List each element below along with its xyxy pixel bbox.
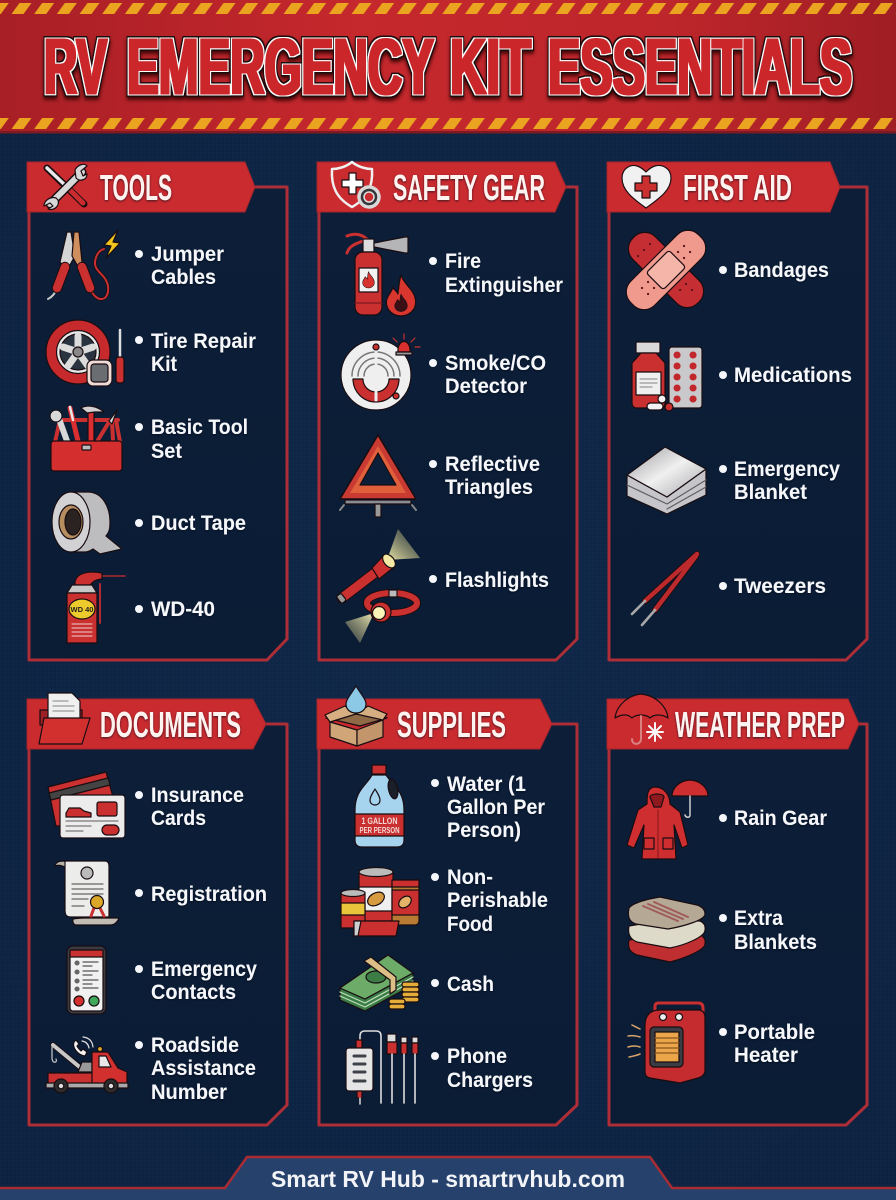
label: basic tool set: Basic Tool — [151, 416, 248, 439]
label: roadside assistance number: Roadside — [151, 1034, 239, 1057]
label: basic tool set: Set — [151, 440, 182, 463]
icon: medications — [632, 342, 702, 411]
label: fire extinguisher: Extinguisher — [445, 274, 563, 297]
title: KIT — [450, 22, 531, 111]
icon: water jug: 1 GALLON — [362, 816, 398, 826]
label: medications: Medications — [734, 364, 852, 387]
label: emergency blanket: Blanket — [734, 481, 807, 504]
icon: phone contacts — [67, 946, 106, 1014]
bullet — [429, 460, 437, 468]
label: water — [447, 773, 545, 842]
icon: canned food — [341, 868, 419, 936]
item: emergency blanket — [627, 447, 840, 514]
label: insurance cards — [151, 784, 244, 830]
label: rain gear: Rain Gear — [734, 807, 827, 830]
icon: box with water drop — [325, 686, 387, 746]
item: bandages — [620, 224, 829, 316]
item: duct tape — [52, 492, 246, 554]
icon: flashlight and headlamp — [336, 529, 420, 643]
icon: heart with cross — [622, 166, 671, 208]
heading: DOCUMENTS — [100, 704, 241, 745]
label: flashlights: Flashlights — [445, 569, 549, 592]
bullet — [135, 519, 143, 527]
bullet — [429, 575, 437, 583]
label: emergency blanket — [734, 458, 840, 504]
icon: umbrella and snowflake — [615, 694, 668, 744]
label: water: Person) — [447, 819, 521, 842]
bullet — [719, 371, 727, 379]
icon: emergency blanket — [627, 447, 706, 514]
bullet — [429, 359, 437, 367]
label: bandages: Bandages — [734, 259, 829, 282]
icon: registration scroll — [55, 861, 119, 925]
label: phone chargers — [447, 1045, 533, 1092]
item: tire repair kit — [46, 320, 256, 386]
bullet — [431, 779, 439, 787]
item: basic tool set — [50, 406, 248, 471]
title: EMERGENCY — [127, 22, 434, 111]
label: extra blankets: Blankets — [734, 931, 817, 954]
icon: water jug — [355, 765, 404, 847]
icon: tweezers — [632, 554, 697, 625]
bullet — [431, 979, 439, 987]
icon: cash and coins — [340, 955, 419, 1011]
icon: toolbox — [50, 406, 122, 471]
label: phone chargers: Phone — [447, 1045, 507, 1068]
icon: shield and gear — [332, 162, 379, 207]
icon: wrench and screwdriver — [44, 164, 87, 209]
label: extra blankets: Extra — [734, 907, 783, 930]
icon: water jug: PER PERSON — [360, 826, 400, 835]
icon: stacked blankets — [628, 897, 705, 962]
item: flashlights — [336, 529, 549, 643]
panel header: supplies — [317, 686, 552, 749]
label: water: Gallon Per — [447, 796, 545, 819]
item: reflective triangles — [340, 435, 540, 517]
label: portable heater — [734, 1021, 815, 1067]
label: insurance cards: Cards — [151, 807, 206, 830]
panel header: weather prep — [607, 694, 859, 749]
label: reflective triangles: Reflective — [445, 453, 540, 476]
bullet — [135, 965, 143, 973]
label: extra blankets — [734, 907, 817, 954]
footer text: Smart RV Hub - smartrvhub.com — [271, 1166, 625, 1192]
heading: TOOLS — [100, 167, 172, 208]
bullet — [429, 257, 437, 265]
label: roadside assistance number: Number — [151, 1081, 227, 1104]
item: non-perishable food — [341, 866, 548, 936]
footer — [0, 1157, 896, 1200]
label: smoke/co detector — [445, 352, 546, 398]
label: smoke/co detector: Detector — [445, 375, 527, 398]
panel header: tools — [27, 162, 255, 212]
label: non-perishable food: Non- — [447, 866, 493, 889]
title banner — [0, 0, 896, 134]
label: portable heater: Heater — [734, 1044, 798, 1067]
label: phone chargers: Chargers — [447, 1069, 533, 1092]
label: reflective triangles: Triangles — [445, 476, 533, 499]
panel header: first aid — [607, 162, 840, 212]
panel: weather prep — [607, 694, 867, 1125]
item: smoke/co detector — [341, 334, 546, 410]
panel: tools — [27, 162, 287, 660]
panel: first aid — [607, 162, 867, 660]
bullet — [135, 1041, 143, 1049]
label: fire extinguisher: Fire — [445, 250, 481, 273]
icon: tow truck — [46, 1037, 128, 1093]
bullet — [135, 423, 143, 431]
item: wd-40 — [67, 572, 215, 643]
panel: safety gear — [317, 162, 577, 660]
bullet — [135, 605, 143, 613]
label: smoke/co detector: Smoke/CO — [445, 352, 546, 375]
label: non-perishable food: Perishable — [447, 889, 548, 912]
icon: smoke detector — [341, 334, 420, 410]
bullet — [719, 266, 727, 274]
icon: tire repair — [46, 320, 124, 386]
bullet — [431, 873, 439, 881]
title — [44, 22, 852, 111]
item: cash — [340, 955, 494, 1011]
label: non-perishable food: Food — [447, 913, 493, 936]
label: wd-40: WD-40 — [151, 598, 215, 621]
label: emergency contacts: Contacts — [151, 981, 236, 1004]
title: RV — [44, 22, 107, 111]
label: cash: Cash — [447, 973, 494, 996]
item: portable heater — [628, 1003, 815, 1083]
panel header: safety gear — [317, 162, 566, 212]
item: jumper cables — [48, 230, 224, 299]
label: insurance cards: Insurance — [151, 784, 244, 807]
heading: SAFETY GEAR — [393, 167, 545, 208]
bullet — [719, 1028, 727, 1036]
bullet — [719, 914, 727, 922]
label: tire repair kit: Kit — [151, 353, 177, 376]
label: reflective triangles — [445, 453, 540, 499]
label: jumper cables: Jumper — [151, 243, 224, 266]
bullet — [431, 1052, 439, 1060]
icon: duct tape — [52, 492, 122, 554]
panel: supplies — [317, 686, 577, 1125]
icon: spray can: WD 40 — [71, 605, 93, 614]
label: emergency contacts — [151, 958, 257, 1004]
item: registration — [55, 861, 267, 925]
icon: spray can — [67, 572, 125, 643]
panel header: documents — [27, 693, 266, 749]
icon: warning triangle — [340, 435, 416, 517]
icon: folder with papers — [39, 693, 90, 744]
item: medications — [632, 342, 852, 411]
icon: fire extinguisher — [347, 234, 416, 316]
label: water: Water (1 — [447, 773, 526, 796]
bullet — [135, 889, 143, 897]
icon: bandages — [620, 224, 712, 316]
bullet — [135, 250, 143, 258]
item: roadside assistance number — [46, 1034, 256, 1104]
icon: jumper cables — [48, 230, 120, 299]
label: emergency contacts: Emergency — [151, 958, 257, 981]
label: tire repair kit: Tire Repair — [151, 330, 256, 353]
bullet — [135, 336, 143, 344]
icon: portable heater — [628, 1003, 705, 1083]
label: roadside assistance number — [151, 1034, 256, 1104]
label: duct tape: Duct Tape — [151, 512, 246, 535]
label: emergency blanket: Emergency — [734, 458, 840, 481]
item: fire extinguisher — [347, 234, 563, 316]
label: portable heater: Portable — [734, 1021, 815, 1044]
item: phone chargers — [346, 1031, 533, 1104]
label: jumper cables: Cables — [151, 266, 216, 289]
label: tire repair kit — [151, 330, 256, 376]
item: extra blankets — [628, 897, 817, 962]
item: emergency contacts — [67, 946, 257, 1014]
label: basic tool set — [151, 416, 248, 463]
heading: SUPPLIES — [397, 704, 506, 745]
icon: raincoat and umbrella — [627, 780, 708, 859]
bullet — [719, 814, 727, 822]
bullet — [135, 791, 143, 799]
label: registration: Registration — [151, 883, 267, 906]
heading: FIRST AID — [683, 167, 792, 208]
label: non-perishable food — [447, 866, 548, 936]
icon: power bank and cables — [346, 1031, 418, 1104]
item: insurance cards — [48, 772, 244, 838]
bullet — [719, 582, 727, 590]
label: jumper cables — [151, 243, 224, 289]
item: rain gear — [627, 780, 827, 859]
label: roadside assistance number: Assistance — [151, 1057, 256, 1080]
label: tweezers: Tweezers — [734, 575, 826, 598]
item: tweezers — [632, 554, 826, 625]
bullet — [719, 465, 727, 473]
label: fire extinguisher — [445, 250, 563, 297]
item: water — [355, 765, 545, 847]
panel: documents — [27, 693, 287, 1125]
icon: insurance cards — [48, 772, 125, 838]
